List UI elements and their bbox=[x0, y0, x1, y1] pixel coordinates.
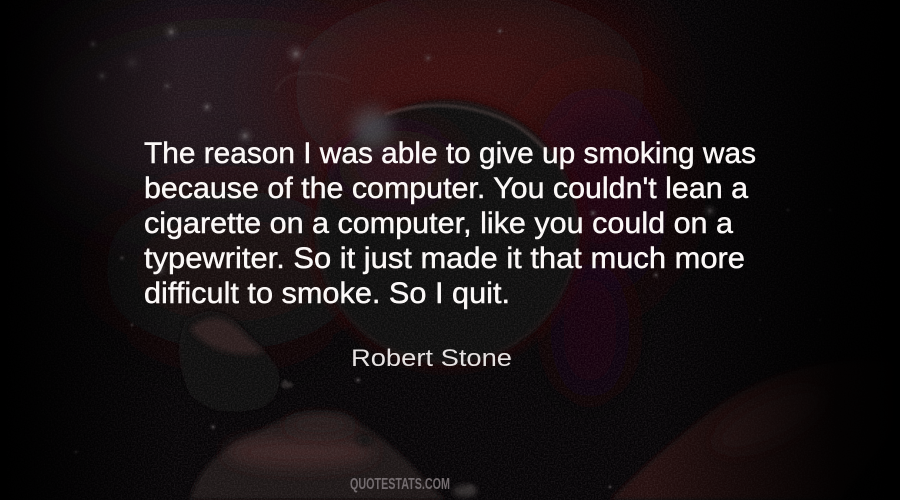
rock: upper asteroid bbox=[179, 311, 293, 412]
stars: upper-left cluster and scattered points bbox=[73, 23, 833, 496]
watermark: QUOTESTATS.COM bbox=[350, 476, 450, 493]
rock: lower asteroid bbox=[190, 412, 445, 500]
planet: dark eclipsed sphere with rim light bbox=[275, 73, 580, 365]
rock: red asteroid at right bbox=[453, 360, 900, 500]
author name: Robert Stone bbox=[351, 345, 512, 372]
quote text: The reason I was able to give up smoking was bbox=[144, 137, 756, 170]
quote text: because of the computer. You couldn't lean a bbox=[144, 172, 748, 205]
quote text: typewriter. So it just made it that much more bbox=[144, 242, 745, 275]
quote text bbox=[144, 137, 756, 310]
quote text: difficult to smoke. So I quit. bbox=[144, 277, 510, 310]
quote text: cigarette on a computer, like you could on a bbox=[144, 207, 733, 240]
